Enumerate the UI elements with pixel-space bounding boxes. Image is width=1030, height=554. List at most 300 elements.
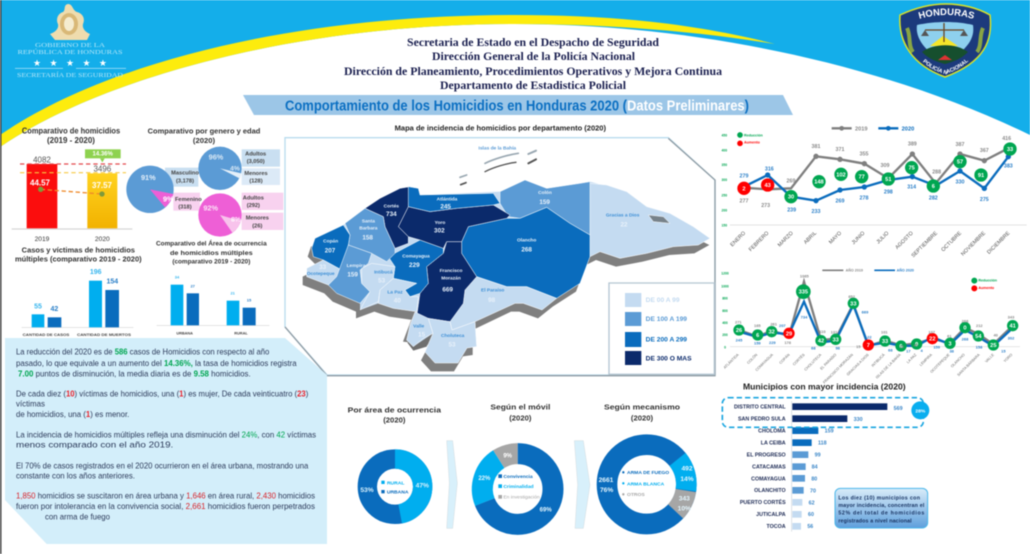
panel: donut charts [348,403,702,540]
month labels: MARZO [777,231,795,248]
bar chart: 34 [175,275,180,280]
heading: por area: Por área de ocurrencia [348,405,442,414]
panel: monthly line chart: 233 [812,209,820,215]
text block: De cada diez (10) víctimas de homicidios, una (1) es mujer, De cada veinticuatro (23) [16,389,309,399]
values: 84 [812,464,818,470]
donut: area: RURAL [387,480,404,486]
panel: department line chart: 68 [811,346,816,351]
values: 80 [811,476,817,482]
values: 309 [881,163,889,169]
difference markers: 54 [975,334,982,340]
month labels: ABRIL [803,230,818,246]
y axis: 200 [722,209,727,213]
department labels: Choluteca [441,333,465,339]
department labels: FRANCISCO MORAZÁN [822,353,854,385]
panel: summary text [5,338,327,544]
panel: municipios [722,382,929,532]
legend: Aumento [744,141,761,145]
bar chart: 15 [247,298,252,303]
department labels: Valle [413,324,424,330]
municipality labels: JUTICALPA [756,512,786,518]
pie labels [171,151,269,229]
pie labels: Masculino [171,171,199,177]
municipality labels: DISTRITO CENTRAL [734,405,786,411]
bar chart: 2019 [35,236,50,243]
pie: femenino [198,193,242,237]
values: 1065 [800,273,810,278]
department labels: CHOLUTECA [804,352,823,372]
bar chart: 4082 [33,155,51,164]
donut: movil: 69% [540,508,552,514]
icon: coat of arms [50,4,90,40]
panel: map of incidence [285,126,715,376]
panel: area de ocurrencia multiples [156,241,269,335]
bar chart [12,149,132,243]
department labels: 98 [488,297,496,304]
values: 212 [976,323,983,328]
panel: department line chart: 15 [1001,349,1006,354]
bar chart [157,275,269,335]
department labels: 40 [394,297,401,304]
department labels: OCOTEPEQUE [930,352,951,374]
difference markers: 148 [814,180,824,186]
legend [822,268,997,291]
heading: movil: Según el móvil [490,403,550,412]
institutional heading: Secretaria de Estado en el Despacho de Seguridad [407,37,660,49]
heading: movil: (2020) [509,413,532,422]
month labels: SEPTIEMBRE [911,230,939,259]
line 2020 [739,302,1013,346]
legend: 2019 [855,126,868,132]
difference markers: 0 [963,326,967,332]
department labels: SANTA BÁRBARA [957,352,981,377]
values: 371 [836,147,844,153]
department labels: ATLÁNTIDA [723,352,740,370]
text block: La incidencia de homicidios múltiples refleja una disminución del 24%, con 42 víctimas [16,429,316,439]
panel: department line chart: 207 [779,323,786,328]
difference markers [733,284,1018,352]
municipality labels: CHOLOMA [758,429,786,435]
highlight: top two: 28% [915,408,926,414]
y axis: 0 [724,345,726,349]
panel: monthly line chart: 279 [740,174,748,180]
department labels [723,352,1013,385]
department labels: 53 [378,277,386,284]
text block: fueron por intolerancia en la convivencia social, 2,661 homicidios fueron perpetrados [16,501,315,511]
bar chart: 14.36% [93,152,113,158]
y axis: 600 [722,309,728,313]
panel: area de ocurrencia multiples: (comparativo 2019 - 2020) [172,259,250,266]
difference markers: 335 [799,290,808,296]
map legend [609,283,714,374]
donut: area: URBANA [387,490,409,496]
municipality labels: PUERTO CORTÉS [740,498,786,506]
map legend: DE 300 O MAS [646,356,692,363]
heading: Municipios con mayor incidencia (2020) [743,382,906,391]
month labels: OCTUBRE [940,230,963,253]
heading: por area: (2020) [383,416,406,425]
department labels: Francisco [440,268,462,274]
panel: department line chart: 98 [835,346,841,351]
bars [792,403,887,530]
bar chart: 44.57 [30,178,51,187]
donut: mecanismo: 492 [681,466,693,473]
values: 273 [761,203,770,209]
bar chart: 154 [107,279,118,286]
bar chart: 3496 [93,165,112,174]
month labels: JUNIO [851,231,866,246]
values: 652 [848,294,856,299]
department labels: 734 [386,211,397,218]
department labels: Ocotepeque [307,271,335,277]
y axis: 150 [722,223,727,227]
bar chart: RURAL [234,331,248,335]
panel: casos y victimas multiples [15,245,142,337]
text block: pasado, lo que equivale a un aumento del 14.36%, la tasa de homicidios registra [16,358,297,368]
panel: department line chart: 38 [949,348,955,353]
panel: monthly line chart: 383 [1004,164,1013,170]
panel: department line chart: 302 [1008,336,1015,341]
heading: Casos y víctimas de homicidios [22,245,135,254]
difference markers: 3 [948,341,952,347]
values: 101 [881,330,888,335]
panel: department line chart: 159 [933,345,941,350]
pie: masculino: 96% [209,153,224,162]
department labels: LA PAZ [906,352,918,364]
y axis: 400 [722,321,728,325]
bar chart: 196 [90,269,102,276]
department labels: ISLAS DE LA BAHÍA [875,352,902,380]
heading: mecanismo: Según mecanismo [604,403,680,412]
panel: monthly line chart: 316 [765,166,774,172]
values: 61 [947,333,952,338]
department labels: Olancho [517,238,536,244]
pie labels: Adultos [245,151,266,157]
panel: department line chart: 245 [736,338,743,343]
department labels: 53 [448,341,456,348]
department labels: INTIBUCÁ [871,352,886,368]
y axis: 250 [722,194,727,198]
department labels: Atlántida [437,197,458,203]
text block: La reducción del 2020 es de 586 casos de Homicidios con respecto al año [16,347,270,357]
values: 15 [856,344,861,349]
department labels: VALLE [984,352,995,364]
donut: mecanismo: 10% [678,506,691,513]
department labels: 22 [620,221,628,228]
values [807,406,903,530]
islands [460,151,536,185]
heading: Comparativo por genero y edad [148,126,261,135]
values: 70 [810,488,816,494]
pie labels: Adultos [243,195,264,201]
month labels: DICIEMBRE [986,230,1012,256]
y axis: 450 [722,134,727,138]
panel: monthly line chart: 275 [980,197,989,203]
department labels: El Paraíso [481,288,504,294]
pie labels: (26) [252,223,262,229]
bar chart: CANTIDAD DE MUERTOS [77,333,132,337]
difference markers: 75 [909,166,915,172]
legend [737,126,914,146]
gulf of Fonseca [407,333,432,351]
panel: department line chart: 22 [867,335,872,340]
department labels: 159 [539,199,550,206]
logo: Policía Nacional badge: POLICÍA NACIONAL [922,58,969,75]
department labels: YORO [1003,353,1013,363]
difference markers: 32 [769,330,775,336]
legend: Aumento [978,286,995,290]
department labels: 268 [521,247,532,254]
values: 277 [740,199,748,205]
month labels [729,230,1012,259]
values: 269 [787,178,795,184]
pie labels: (3,050) [247,159,265,165]
pie labels: Femenino [175,197,202,203]
panel: monthly line chart: 269 [836,198,844,204]
logo: Policía Nacional badge [898,2,992,78]
callout [835,488,928,528]
heading: mecanismo: (2020) [631,413,654,422]
panel: department line chart: 669 [862,309,869,314]
department labels: COLÓN [746,352,759,365]
values: 49 [913,343,919,348]
difference markers: 2 [742,186,746,192]
map shadow [303,188,709,371]
axis [791,401,793,532]
pie: femenino: 92% [203,204,218,213]
pie: genero: 91% [141,173,156,182]
text block: El 70% de casos registrados en el 2020 ocurrieron en el área urbana, mostrando una [16,460,309,470]
bar chart: 27 [190,283,196,288]
values: 137 [928,329,936,334]
department labels: COMAYAGUA [755,352,774,372]
logo: Gobierno de la República: SECRETARÍA DE SEGURIDAD [17,71,124,79]
month labels: MAYO [828,231,843,246]
institutional heading [344,37,722,92]
values: 159 [825,429,834,435]
donut: movil [469,440,566,538]
y axis: 400 [722,148,727,152]
department labels: Santa [362,218,375,224]
institutional heading: Dirección General de la Policía Nacional [432,51,635,63]
pie: genero: 9% [163,194,174,203]
month labels: AGOSTO [894,231,915,251]
donut: movil: En investigación [503,495,540,501]
panel: department line chart: 734 [801,315,808,320]
donut: area [360,459,429,514]
difference markers: 33 [882,339,888,345]
panel: area de ocurrencia multiples: de homicidios múltiples [170,250,253,257]
department labels: LEMPIRA [919,352,933,367]
text block: víctimas [16,398,45,408]
municipality labels: LA CEIBA [761,441,786,447]
difference markers: 6 [932,184,935,190]
department labels: Barbara [359,226,378,232]
department labels: 229 [409,262,420,269]
pie labels: (292) [247,203,260,209]
panel: monthly line chart: 330 [956,180,964,186]
values: 271 [735,320,742,325]
department labels: COPÁN [779,353,791,365]
difference markers: 42 [818,339,824,345]
donut: movil: Criminalidad [503,484,534,490]
department labels: 669 [442,286,453,293]
text block: 1,850 homicidios se suscitaron en área urbana y 1,646 en área rural, 2,430 homicidios [16,491,315,501]
values: 367 [980,148,989,154]
values: 343 [1008,315,1015,320]
highlight: top two [722,398,929,427]
department labels: 33 [319,264,327,271]
department labels: 158 [362,234,373,241]
pie labels: Menores [246,215,269,221]
difference markers: 33 [833,337,839,343]
panel: department line chart: 17 [906,348,911,353]
department labels [307,145,640,348]
logo: Policía Nacional badge: HONDURAS [918,8,975,20]
department labels: OLANCHO [950,353,966,369]
y axis: 300 [722,178,727,182]
callout: mayor incidencia, concentran el [838,503,925,509]
values: 60 [808,512,814,518]
heading: movil [490,403,550,422]
donut: mecanismo: ARMA DE FUEGO [627,470,669,476]
y axis [721,272,729,349]
difference markers: 30 [788,195,794,201]
donut: movil: 9% [503,454,513,460]
department labels: Comayagua [402,253,430,259]
department labels: 159 [347,272,358,279]
department labels: 302 [434,227,445,234]
heading: por area [348,405,442,425]
values: 99 [815,453,821,459]
department labels: CORTÉS [791,352,806,366]
pie: femenino: 8% [231,217,241,224]
panel: comparativo por genero y edad: (2020) [193,136,216,145]
values: 330 [854,417,863,423]
logo: Gobierno de la República: GOBIERNO DE LA [35,43,106,49]
institutional heading: Departamento de Estadistica Policial [440,80,626,92]
logo: Gobierno de la República [15,4,126,79]
municipality labels: SAN PEDRO SULA [738,417,786,423]
values: 416 [1002,136,1011,142]
donut: mecanismo: OTROS [627,492,645,498]
values [740,136,1011,209]
values: 569 [894,406,903,412]
panel: comparativo de homicidios: (2019 - 2020) [47,136,95,145]
y axis [722,134,727,227]
municipality labels: COMAYAGUA [751,476,786,482]
legend: AÑO 2019 [846,268,863,273]
panel: comparativo por genero y edad [126,126,283,237]
heading: Comparativo del Área de ocurrencia [156,241,267,248]
department labels: Islas de la Bahía [479,145,516,151]
municipality labels: CATACAMAS [752,464,786,470]
department labels: Gracias a Dios [606,213,640,219]
departments [307,180,710,363]
donut: mecanismo: 2661 [599,477,614,484]
bar chart: CANTIDAD DE CASOS [23,333,70,337]
map legend: DE 200 A 299 [646,336,687,343]
department labels: EL PARAÍSO [819,353,837,371]
title banner [243,95,793,115]
donut: movil: 22% [478,476,491,482]
values: 110 [819,329,826,334]
text block: constante con los años anteriores. [16,470,135,480]
donut: area: 47% [416,483,429,490]
legend: Reducción [744,133,763,137]
difference markers: 77 [859,175,865,181]
values: 387 [956,142,964,148]
difference markers: 43 [765,183,771,189]
department labels: Colón [538,190,552,196]
department labels: Copán [323,238,338,244]
heading: Comparativo de homicidios [22,126,121,135]
difference markers: 33 [1007,147,1013,153]
difference markers: 91 [978,173,984,179]
panel: department line chart: 4 [921,348,924,353]
line 2019 [739,282,1013,346]
text block: menos comparado con el año 2019. [16,439,173,449]
y axis: 350 [722,163,727,167]
difference markers: 7 [867,343,870,349]
heading: mecanismo [604,403,680,422]
panel: comparativo de homicidios [12,126,132,243]
pie labels: (128) [249,179,263,185]
panel: casos y victimas multiples: múltiples (comparativo 2019 - 2020) [15,255,142,264]
pie labels: Menores [244,171,268,177]
logo: Gobierno de la República: REPÚBLICA DE HONDURAS [18,48,122,56]
department labels: Lempira [347,263,366,269]
values: 25 [899,344,905,349]
values: 62 [809,500,815,506]
department labels: Yoro [435,220,445,226]
values: 389 [908,141,917,147]
chevron arrow [574,441,590,528]
donut: mecanismo: 14% [680,476,694,483]
bar chart: URBANA [176,331,193,335]
values [735,273,1015,349]
bar chart [22,269,133,337]
line 2020 [744,154,1011,203]
text block: con arma de fuego [45,512,110,522]
values: 40 [993,333,999,338]
text block: de homicidios, una (1) es menor. [16,409,129,419]
difference markers: 102 [836,172,846,178]
department labels: 245 [440,204,451,211]
donut: mecanismo: 343 [679,496,690,503]
values: 268 [962,318,969,323]
pie: masculino [198,147,242,190]
department labels: Intibucá [374,270,393,276]
department labels: 15 [418,331,426,338]
y axis: 800 [722,297,728,301]
department labels: 207 [325,247,336,254]
municipality labels [734,405,786,530]
difference markers [737,142,1017,203]
y axis: 1000 [721,284,729,288]
callout: 52% del total de homicidios [838,511,924,517]
panel: monthly line chart: 282 [929,195,938,201]
y axis: 200 [722,333,728,337]
panel: department line chart: 268 [962,336,969,341]
panel: monthly line chart: 298 [884,190,893,196]
donut: mecanismo [591,429,702,540]
panel: department line chart: 229 [769,340,776,345]
panel: department line chart [721,268,1020,385]
map legend: DE 100 A 199 [646,316,687,323]
text block: 7.00 puntos de disminución, la media diaria es de 9.58 homicidios. [18,369,251,379]
panel: department line chart: 68 [888,347,893,352]
